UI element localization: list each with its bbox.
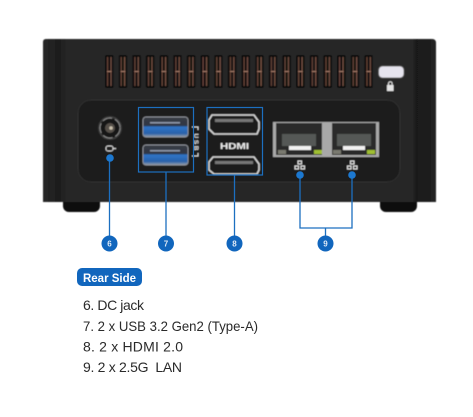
HDMI port upper xyxy=(209,115,259,134)
LAN port right xyxy=(332,123,376,155)
callout 8: 8 xyxy=(232,240,237,248)
USB ports xyxy=(143,117,199,165)
item 9: 9. 2 x 2.5G LAN xyxy=(83,359,182,375)
chassis xyxy=(43,39,436,202)
USB port lower xyxy=(143,145,188,165)
left foot xyxy=(63,195,100,212)
USB highlight box xyxy=(138,108,194,172)
callout 9 xyxy=(296,171,356,252)
USB port upper xyxy=(143,117,188,137)
LAN ports xyxy=(273,122,379,169)
icon: lock xyxy=(387,82,394,91)
HDMI highlight box xyxy=(207,108,262,175)
badge: Rear Side xyxy=(77,268,142,286)
vent slots xyxy=(105,55,373,88)
mini PC body xyxy=(43,39,436,212)
DC jack xyxy=(98,116,122,151)
item 7: 7. 2 x USB 3.2 Gen2 (Type-A) xyxy=(83,318,258,334)
icon: power xyxy=(106,146,116,151)
callout 9: 9 xyxy=(323,240,328,248)
item 6: 6. DC jack xyxy=(83,297,145,313)
port panel xyxy=(78,100,400,182)
lock slot xyxy=(378,66,404,78)
LAN icons xyxy=(295,161,357,169)
callout 8 xyxy=(226,175,242,252)
item 8: 8. 2 x HDMI 2.0 xyxy=(83,338,183,354)
LAN port left xyxy=(276,123,322,155)
USB label: USB xyxy=(192,134,199,151)
badge: Rear Side: Rear Side xyxy=(83,271,136,285)
feature list xyxy=(83,297,258,375)
callout 6 xyxy=(102,154,118,252)
callout 7 xyxy=(158,172,174,252)
callout 7: 7 xyxy=(164,240,169,248)
HDMI port lower xyxy=(209,157,259,174)
callout 6: 6 xyxy=(107,240,112,248)
right foot xyxy=(380,195,417,212)
HDMI ports xyxy=(209,115,259,174)
HDMI logo: HDMI xyxy=(220,141,249,151)
